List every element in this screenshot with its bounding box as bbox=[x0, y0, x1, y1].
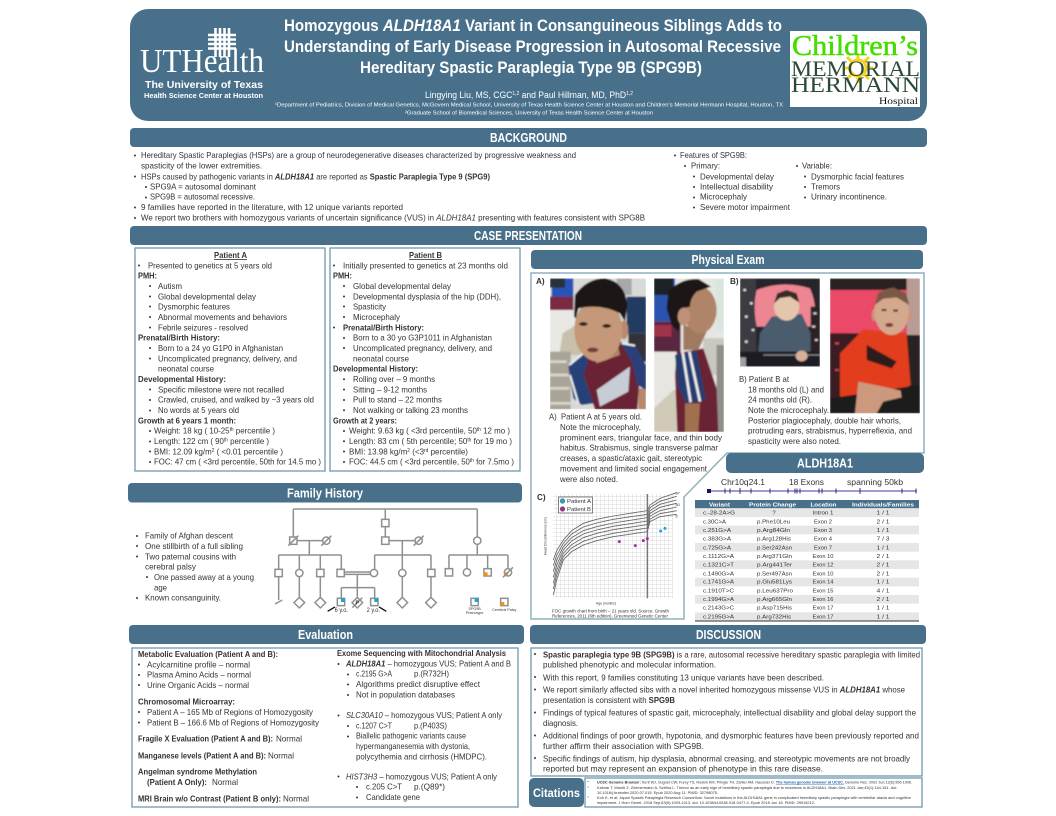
panel: discussion: We report similarly affected sibs with a novel inherited homozygous missense VUS in ALDH18A1 whose bbox=[543, 686, 905, 695]
table rows: Exon 3 bbox=[814, 528, 833, 534]
panel: patient B: FOC: 44.5 cm ( <3rd percentile, 50 bbox=[349, 458, 475, 467]
gene summary labels: spanning 50kb bbox=[847, 477, 903, 487]
heading: background bbox=[130, 128, 927, 147]
panel: patient B: Spasticity bbox=[353, 303, 387, 312]
table rows: Exon 12 bbox=[812, 563, 834, 569]
panel: patient B: Patient B bbox=[409, 251, 442, 260]
table rows: p.Asp715His bbox=[757, 606, 792, 612]
panel: discussion: presentation is consistent with SPG9B bbox=[543, 696, 675, 705]
panel: patient A: neonatal course bbox=[158, 365, 214, 374]
affiliations bbox=[275, 102, 784, 116]
logo: UTHealth: Health Science Center at Houston bbox=[144, 91, 263, 100]
table rows: 1 / 1 bbox=[876, 606, 890, 612]
panel: patient A: Uncomplicated pregnancy, delivery, and bbox=[158, 354, 297, 363]
panel: patient B: Developmental dysplasia of the hip (DDH), bbox=[353, 292, 501, 301]
evaluation right column: hypermanganesemia with dystonia, bbox=[356, 742, 470, 751]
table rows: 1 / 1 bbox=[876, 614, 890, 620]
panel: patient A: Weight: 18 kg ( 10-25 bbox=[154, 427, 232, 436]
logo: UTHealth: UTHealth bbox=[140, 43, 264, 80]
affiliations: ¹Department of Pediatrics, Division of Medical Genetics, McGovern Medical School, University of Texas Health Science Center at Houston and Children’s Memorial Hermann Hospital, Houston, TX bbox=[275, 102, 784, 108]
panel: patient A: Abnormal movements and behaviors bbox=[158, 313, 287, 322]
table rows: c.1994G>A bbox=[703, 597, 734, 603]
evaluation left column: Acylcarnitine profile – normal bbox=[147, 660, 250, 669]
table: variants bbox=[695, 500, 919, 621]
text block: family history: One passed away at a young bbox=[154, 573, 254, 582]
text block: features of SPG9B: Primary: bbox=[691, 162, 720, 171]
evaluation right column: Exome Sequencing with Mitochondrial Analysis bbox=[337, 649, 506, 658]
panel: patient A: Febrile seizures - resolved bbox=[158, 323, 248, 332]
table rows: Exon 2 bbox=[814, 519, 832, 525]
table rows: c.1490G>A bbox=[703, 571, 734, 577]
panel: patient B bbox=[330, 248, 520, 471]
evaluation left column: Normal bbox=[268, 751, 294, 760]
table rows: Intron 1 bbox=[812, 511, 834, 517]
table rows: c.1112G>A bbox=[703, 554, 734, 560]
evaluation left column: Manganese levels (Patient A and B): bbox=[138, 751, 266, 760]
evaluation right column: c.205 C>T bbox=[366, 783, 402, 792]
logo: Children's Memorial Hermann bbox=[790, 30, 920, 107]
panel: patient B: th bbox=[467, 438, 472, 444]
text block: family history: Known consanguinity. bbox=[145, 594, 221, 603]
text block: features of SPG9B: Tremors bbox=[811, 182, 840, 191]
panel: discussion bbox=[531, 648, 922, 776]
heading: evaluation bbox=[129, 625, 524, 644]
pedigree chart: 6 y.o. bbox=[335, 607, 348, 614]
table rows: p.Phe10Leu bbox=[757, 519, 790, 525]
evaluation right column: polycythemia and cirrhosis (HMDPC). bbox=[356, 752, 487, 761]
table header: Location bbox=[810, 502, 837, 508]
panel: patient B: Global developmental delay bbox=[353, 282, 452, 291]
gene summary labels: 18 Exons bbox=[789, 477, 824, 487]
panel: patient B: 2 bbox=[407, 448, 410, 454]
heading: citations bbox=[529, 778, 584, 807]
pedigree chart: SPG9B bbox=[469, 607, 481, 611]
panel: patient A: No words at 5 years old bbox=[158, 406, 239, 415]
panel: discussion: diagnosis. bbox=[543, 719, 578, 728]
panel: patient B: rd bbox=[424, 448, 429, 454]
evaluation left column: (Patient A Only): bbox=[147, 778, 207, 787]
table rows: 7 / 3 bbox=[876, 537, 890, 543]
photo: patient B 24 months bbox=[830, 278, 920, 413]
heading: discussion: DISCUSSION bbox=[696, 628, 761, 642]
panel: citations: Koh K, et al; Japan Spastic Paraplegia Research Consortium. Novel mutations in the ALDH18A1 gene in complicated hereditary spastic paraplegia with cerebellar ataxia and cognitive bbox=[597, 796, 911, 800]
evaluation right column: p.(Q89*) bbox=[414, 783, 445, 792]
panel: patient A: Developmental History: bbox=[138, 375, 226, 384]
pedigree chart bbox=[275, 509, 516, 615]
caption: patient B: Posterior plagiocephaly, double hair whorls, bbox=[748, 416, 901, 425]
text block: family history: Family of Afghan descent bbox=[145, 532, 234, 541]
heading: physical exam bbox=[531, 250, 923, 269]
table rows: c.383G>A bbox=[703, 537, 731, 543]
gene summary labels: Chr10q24.1 bbox=[721, 477, 765, 487]
table rows: 2 / 1 bbox=[876, 519, 890, 525]
panel: patient B: neonatal course bbox=[353, 354, 409, 363]
table rows: Exon 15 bbox=[812, 588, 834, 594]
table rows: c.2195G>A bbox=[703, 614, 734, 620]
evaluation right column: c.1207 C>T bbox=[356, 721, 392, 730]
panel: header banner bbox=[130, 9, 927, 121]
table rows: p.Ser242Asn bbox=[757, 545, 792, 551]
panel: patient B: Weight: 9.63 kg ( <3rd percentile, 50 bbox=[349, 427, 481, 436]
panel: citations bbox=[585, 778, 922, 807]
panel: patient A: Dysmorphic features bbox=[158, 303, 230, 312]
evaluation right column: SLC30A10 – homozygous VUS; Patient A only bbox=[346, 711, 503, 720]
evaluation right column: HIST3H3 – homozygous VUS; Patient A only bbox=[346, 772, 498, 781]
caption: patient B bbox=[739, 375, 912, 446]
table rows: Exon 17 bbox=[812, 614, 834, 620]
panel: patient B: Length: 83 cm ( 5th percentile; 50 bbox=[349, 437, 471, 446]
evaluation left column: Angelman syndrome Methylation bbox=[138, 768, 257, 777]
panel: patient A: Presented to genetics at 5 years old bbox=[148, 261, 272, 270]
panel: patient B: Microcephaly bbox=[353, 313, 401, 322]
panel: patient A: FOC: 47 cm ( <3rd percentile, 50th for 14.5 mo ) bbox=[154, 458, 321, 467]
panel: discussion: With this report, 9 families constituting 13 unique variants have been described. bbox=[543, 673, 824, 682]
caption: patient B: protruding ears, strabismus, hyperreflexia, and bbox=[748, 427, 912, 436]
title: Hereditary Spastic Paraplegia Type 9B (SPG9B) bbox=[360, 59, 702, 77]
table header: Variant bbox=[709, 502, 730, 508]
panel: patient A: Crawled, cruised, and walked by ~3 years old bbox=[158, 396, 314, 405]
panel: patient B: BMI: 13.98 kg/m bbox=[349, 447, 409, 456]
heading: family history bbox=[128, 483, 522, 502]
evaluation right column: Biallelic pathogenic variants cause bbox=[356, 732, 466, 741]
table rows bbox=[703, 511, 890, 620]
caption: patient A: movement and limited social engagement bbox=[560, 464, 708, 474]
logo: Children's Memorial Hermann: Children’s bbox=[792, 30, 918, 62]
evaluation right column: Candidate gene bbox=[366, 793, 420, 802]
table rows: ? bbox=[772, 511, 776, 517]
panel: patient B: th bbox=[477, 427, 481, 433]
evaluation left column: Metabolic Evaluation (Patient A and B): bbox=[138, 650, 278, 659]
evaluation right column: c.2195 G>A bbox=[356, 670, 392, 679]
text block: family history: One stillbirth of a full sibling bbox=[145, 542, 243, 551]
logo: UTHealth: The University of Texas bbox=[145, 79, 263, 91]
caption: growth chart: References, 2011 (6th edition), Greenwood Genetic Center bbox=[552, 614, 668, 619]
panel: patient A: 2 bbox=[212, 448, 215, 454]
pedigree chart: P bbox=[356, 601, 360, 607]
title: Homozygous ALDH18A1 Variant in Consanguineous Siblings Adds to bbox=[284, 17, 782, 35]
table rows: Exon 14 bbox=[812, 580, 834, 586]
caption: patient B: 24 months old (R). bbox=[748, 396, 812, 405]
authors: Lingying Liu, MS, CGC bbox=[425, 90, 523, 101]
panel: patient A: BMI: 12.09 kg/m bbox=[154, 447, 214, 456]
legend: chart: Patient A bbox=[567, 499, 591, 505]
panel: citations: UCSC Genome Browser: Kent WJ, Sugnet CW, Furey TS, Roskin KM, Pringle TH, Zahler AM, Haussler D. The human genome browser at UCSC. Genome Res. 2002 Jun;12(6):996-1006. bbox=[597, 780, 912, 784]
panel: discussion: reported but may represent an expansion of phenotype in this rare disease. bbox=[543, 765, 823, 774]
text block: background left: SPG9B = autosomal recessive. bbox=[150, 193, 255, 202]
panel: discussion: further affirm their association with SPG9B. bbox=[543, 742, 704, 751]
text block: family history: age bbox=[154, 583, 167, 592]
panel: patient B: Sitting – 9-12 months bbox=[353, 385, 427, 394]
table rows: 4 / 1 bbox=[876, 588, 890, 594]
evaluation left column: Urine Organic Acids – normal bbox=[147, 681, 249, 690]
panel: patient B: percentile) bbox=[428, 447, 468, 456]
table rows: c.1910T>C bbox=[703, 588, 735, 594]
panel: discussion: Additional findings of poor growth, hypotonia, and dysmorphic features have been previously reported and bbox=[543, 732, 919, 741]
caption: patient A: habitus. Strabismus, single transverse palmar bbox=[560, 444, 718, 453]
panel: discussion: Specific findings of autism, hip dysplasia, abnormal creasing, and stereotypic movements are not broadly bbox=[543, 754, 911, 763]
caption: patient A: prominent ears, triangular face, and thin body bbox=[560, 433, 723, 442]
table rows: p.Glu581Lys bbox=[757, 580, 792, 586]
text block: family history: cerebral palsy bbox=[145, 563, 197, 572]
text block: background left: spasticity of the lower extremities. bbox=[141, 162, 262, 171]
table rows: 2 / 1 bbox=[876, 554, 890, 560]
table rows: c.251G>A bbox=[703, 528, 731, 534]
table rows: c.725G>A bbox=[703, 545, 731, 551]
table rows: p.Leu637Pro bbox=[757, 588, 794, 594]
logo: Children's Memorial Hermann: MEMORIAL bbox=[791, 56, 920, 81]
pedigree chart: Cerebral Palsy bbox=[492, 608, 516, 612]
table rows: Exon 4 bbox=[814, 537, 833, 543]
authors: 1,2 bbox=[512, 91, 519, 97]
panel: patient B: Pull to stand – 22 months bbox=[353, 396, 442, 405]
text block: background left: SPG9A = autosomal dominant bbox=[150, 182, 257, 191]
photo: patient A profile bbox=[654, 278, 724, 432]
panel: patient A: Global developmental delay bbox=[158, 292, 257, 301]
panel: patient A: Growth at 6 years 1 month: bbox=[138, 416, 236, 425]
text block: features of SPG9B: Developmental delay bbox=[700, 172, 775, 181]
table rows: c.2143G>C bbox=[703, 606, 735, 612]
gene summary labels bbox=[721, 477, 903, 487]
panel: patient B: PMH: bbox=[333, 272, 352, 281]
table rows: p.Arg371Gln bbox=[757, 554, 792, 560]
table rows: 2 / 1 bbox=[876, 563, 890, 569]
panel: physical exam bbox=[531, 273, 924, 619]
text block: background left bbox=[135, 151, 646, 222]
heading: case presentation bbox=[130, 226, 927, 245]
table rows: Exon 16 bbox=[812, 597, 834, 603]
photo: patient A front bbox=[550, 278, 646, 409]
table rows: 1 / 1 bbox=[876, 545, 890, 551]
panel: patient A: Patient A bbox=[214, 251, 247, 260]
panel: patient B: Initially presented to genetics at 23 months old bbox=[343, 261, 508, 270]
evaluation left column: Normal bbox=[276, 735, 302, 744]
logo: Children's Memorial Hermann: HERMANN bbox=[791, 72, 920, 97]
evaluation left column: Plasma Amino Acids – normal bbox=[147, 671, 251, 680]
text block: features of SPG9B: Dysmorphic facial features bbox=[811, 172, 904, 181]
legend: chart: Patient B bbox=[567, 507, 591, 513]
panel: discussion: Spastic paraplegia type 9B (SPG9B) is a rare, autosomal recessive hereditary spastic paraplegia with limited bbox=[543, 650, 920, 659]
panel: discussion: published phenotypic and molecular information. bbox=[543, 661, 716, 670]
authors: 1,2 bbox=[626, 91, 633, 97]
caption: patient B: Note the microcephaly. bbox=[748, 406, 829, 415]
text block: features of SPG9B bbox=[675, 151, 904, 212]
heading: discussion bbox=[530, 625, 926, 644]
label: A): A) bbox=[536, 277, 545, 286]
text block: background left: We report two brothers with homozygous variants of uncertain significance (VUS) in ALDH18A1 presenting with features consistent with SPG8B bbox=[141, 213, 646, 222]
evaluation right column bbox=[337, 649, 511, 802]
panel: patient A: Length: 122 cm ( 90 bbox=[154, 437, 227, 446]
text block: features of SPG9B: Severe motor impairment bbox=[700, 203, 791, 212]
chart: FOC growth chart bbox=[544, 490, 681, 606]
panel: patient B: Growth at 2 years: bbox=[333, 416, 397, 425]
chart: FOC growth chart: 5 bbox=[675, 513, 678, 518]
pedigree chart: 2 y.o. bbox=[367, 607, 380, 614]
table rows: Exon 7 bbox=[814, 545, 832, 551]
heading: ALDH18A1: ALDH18A1 bbox=[797, 456, 853, 470]
text block: features of SPG9B: Intellectual disability bbox=[700, 182, 774, 191]
chart: FOC growth chart: 50 bbox=[675, 502, 681, 507]
table rows: p.Arg128His bbox=[757, 537, 791, 543]
panel: citations: 10.1016/j.braindev.2020.07.015. Epub 2020 Aug 11. PMID: 32798075. bbox=[597, 791, 718, 795]
evaluation right column: p.(R732H) bbox=[414, 670, 449, 679]
panel: patient A: th bbox=[224, 438, 228, 444]
heading: family history: Family History bbox=[287, 486, 363, 500]
heading: physical exam: Physical Exam bbox=[692, 253, 764, 267]
evaluation left column: Normal bbox=[283, 795, 309, 804]
panel: patient B: 12 mo ) bbox=[481, 427, 510, 436]
caption: patient A: A) Patient A at 5 years old. bbox=[549, 413, 642, 422]
caption: patient B: spasticity were also noted. bbox=[748, 437, 841, 446]
chart: FOC growth chart: 97 bbox=[675, 490, 681, 495]
panel: patient A: Autism bbox=[158, 282, 182, 291]
table rows: c.-28-2A>G bbox=[703, 511, 735, 517]
panel: patient A: percentile ) bbox=[228, 437, 269, 446]
table rows: 1 / 1 bbox=[876, 580, 890, 586]
affiliations: ²Graduate School of Biomedical Sciences, University of Texas Health Science Center at Houston bbox=[405, 110, 653, 116]
caption: patient B: 18 months old (L) and bbox=[748, 385, 824, 394]
table rows: Exon 10 bbox=[812, 554, 834, 560]
table rows: p.Arg84Gln bbox=[757, 528, 790, 534]
caption: patient A bbox=[549, 413, 723, 484]
panel: discussion: Findings of typical features of spastic gait, microcephaly, intellectual disability and global delay support the bbox=[543, 709, 916, 718]
table rows: Exon 10 bbox=[812, 571, 834, 577]
heading: evaluation: Evaluation bbox=[298, 628, 353, 642]
text block: features of SPG9B: Microcephaly bbox=[700, 193, 748, 202]
panel: patient A: ( <0.01 percentile ) bbox=[214, 447, 283, 456]
gene diagram bbox=[707, 488, 917, 494]
heading: citations: Citations bbox=[533, 786, 580, 800]
caption: patient A: Note the microcephaly, bbox=[560, 423, 641, 432]
panel: evaluation bbox=[132, 648, 518, 807]
panel: patient A: Born to a 24 yo G1P0 in Afghanistan bbox=[158, 344, 283, 353]
text block: features of SPG9B: Features of SPG9B: bbox=[680, 151, 747, 160]
logo: UTHealth bbox=[140, 28, 264, 100]
panel: patient A bbox=[135, 248, 325, 471]
text block: background left: HSPs caused by pathogenic variants in ALDH18A1 are reported as Spastic Paraplegia Type 9 (SPG9) bbox=[141, 172, 490, 181]
evaluation left column: Patient B – 166.6 Mb of Regions of Homozygosity bbox=[147, 718, 320, 727]
panel: patient B: (<3 bbox=[410, 447, 424, 456]
panel: patient B: for 19 mo ) bbox=[471, 437, 512, 446]
label: B): B) bbox=[730, 277, 739, 286]
caption: growth chart bbox=[552, 608, 669, 619]
table rows: p.Ser497Asn bbox=[757, 571, 792, 577]
text block: family history bbox=[137, 532, 254, 603]
panel: patient B: th bbox=[470, 458, 474, 464]
panel: patient A: Specific milestone were not recalled bbox=[158, 385, 284, 394]
table rows: c.30C>A bbox=[703, 519, 726, 525]
heading: background: BACKGROUND bbox=[490, 131, 567, 145]
table rows: 2 / 1 bbox=[876, 571, 890, 577]
label: C): C) bbox=[537, 493, 546, 502]
panel: citations: Kalmár T, Maróti Z, Zimmermann A, Sztriha L. Tremor as an early sign of hereditary spastic paraplegia due to mutations in ALDH18A1. Brain Dev. 2021 Jan;43(1):144-151. doi: bbox=[597, 786, 897, 790]
title bbox=[284, 17, 782, 77]
text block: features of SPG9B: Urinary incontinence. bbox=[811, 193, 887, 202]
table header bbox=[709, 502, 915, 508]
panel: patient B: Uncomplicated pregnancy, delivery, and bbox=[353, 344, 492, 353]
panel: patient B: Developmental History: bbox=[333, 365, 418, 374]
title: Understanding of Early Disease Progression in Autosomal Recessive bbox=[284, 38, 781, 56]
caption: patient B: B) Patient B at bbox=[739, 375, 790, 384]
caption: growth chart: FOC growth chart from birth – 21 years old. Source: Growth bbox=[552, 608, 669, 613]
pedigree chart: Phenotype bbox=[466, 611, 483, 615]
table rows: p.Arg441Ter bbox=[757, 563, 792, 569]
panel: patient A: Prenatal/Birth History: bbox=[138, 334, 220, 343]
panel: patient B: Prenatal/Birth History: bbox=[343, 323, 424, 332]
evaluation right column: Not in population databases bbox=[356, 690, 455, 699]
caption: patient A: were also noted. bbox=[559, 475, 618, 484]
panel: citations: impairment. J Hum Genet. 2018 Sep;63(9):1009-1013. doi: 10.1038/s10038-018-0477-0. Epub 2018 Jun 18. PMID: 29915212. bbox=[597, 801, 815, 805]
table rows: c.1321C>T bbox=[703, 563, 734, 569]
table rows: 1 / 1 bbox=[876, 511, 890, 517]
table rows: Exon 17 bbox=[812, 606, 834, 612]
table rows: 1 / 1 bbox=[876, 528, 890, 534]
table header: Protein Change bbox=[749, 502, 797, 508]
table rows: p.Arg665Gln bbox=[757, 597, 792, 603]
table rows: c.1741G>A bbox=[703, 580, 734, 586]
panel: patient A: PMH: bbox=[138, 272, 157, 281]
table rows: p.Arg732His bbox=[757, 614, 791, 620]
panel: patient B: Not walking or talking 23 months bbox=[353, 406, 468, 415]
text block: family history: Two paternal cousins with bbox=[145, 552, 236, 561]
photo: patient B 18 months bbox=[740, 278, 820, 367]
panel: patient B: Born to a 30 yo G3P1011 in Afghanistan bbox=[353, 334, 492, 343]
caption: patient A: creases, a spastic/ataxic gait, stereotypic bbox=[560, 454, 702, 463]
text block: features of SPG9B: Variable: bbox=[802, 162, 832, 171]
authors: and Paul Hillman, MD, PhD bbox=[519, 90, 626, 101]
chart: FOC growth chart: Age (months) bbox=[596, 602, 616, 606]
chart: FOC growth chart: Head Circumference (cm) bbox=[544, 517, 548, 555]
evaluation left column: Patient A – 165 Mb of Regions of Homozygosity bbox=[147, 708, 314, 717]
panel: patient A: th bbox=[230, 427, 234, 433]
legend: chart bbox=[558, 497, 592, 513]
evaluation right column: ALDH18A1 – homozygous VUS; Patient A and B bbox=[345, 660, 511, 669]
text block: background left: Hereditary Spastic Paraplegias (HSPs) are a group of neurodegenerative diseases characterized by progressive weakness and bbox=[141, 151, 576, 160]
panel: patient A: percentile ) bbox=[234, 427, 275, 436]
evaluation left column: MRI Brain w/o Contrast (Patient B only): bbox=[138, 795, 281, 804]
text block: background left: 9 families have reported in the literature, with 12 unique variants reported bbox=[141, 203, 403, 212]
logo: Children's Memorial Hermann: Hospital bbox=[879, 97, 918, 107]
evaluation left column bbox=[138, 650, 320, 804]
evaluation left column: Chromosomal Microarray: bbox=[138, 698, 235, 707]
panel: patient B: Rolling over – 9 months bbox=[353, 375, 435, 384]
evaluation left column: Fragile X Evaluation (Patient A and B): bbox=[138, 735, 273, 744]
heading: ALDH18A1 bbox=[726, 453, 924, 473]
heading: case presentation: CASE PRESENTATION bbox=[474, 229, 582, 243]
table rows: 2 / 1 bbox=[876, 597, 890, 603]
evaluation right column: Algorithms predict disruptive effect bbox=[356, 680, 481, 689]
panel: patient B: for 7.5mo ) bbox=[474, 458, 514, 467]
evaluation right column: p.(P403S) bbox=[414, 721, 447, 730]
table header: Individuals/Families bbox=[852, 502, 915, 508]
evaluation left column: Normal bbox=[212, 778, 238, 787]
